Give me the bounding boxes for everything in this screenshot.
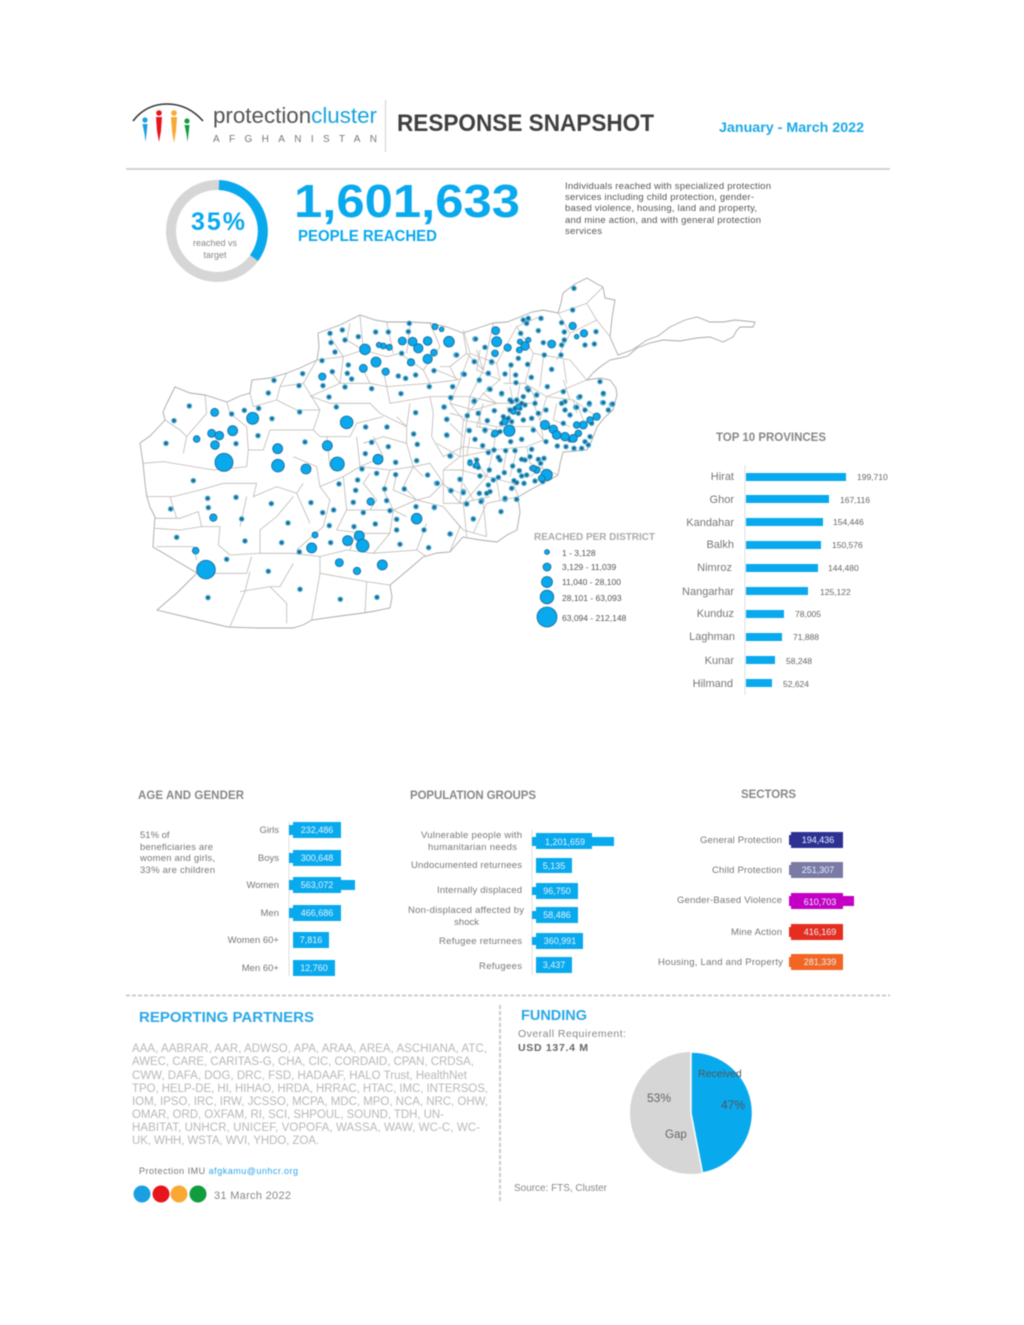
province values: 125,122 [820,587,851,597]
legend ranges: 28,101 - 63,093 [562,593,622,603]
row: internally displaced [437,883,578,899]
logo wordmark: protectioncluster [213,103,377,128]
icon: arc and four figures [133,104,203,143]
panel: population groups [408,790,614,975]
donut: 35% reached vs target: 35% [191,208,245,236]
legend ranges [562,548,627,623]
pie chart: received vs gap: Received [698,1068,742,1080]
row: vulnerable people: 1,201,659 [545,837,585,847]
row: men: 466,686 [301,908,333,918]
panel: reporting partners [132,1009,488,1202]
legend marker sizes [537,550,557,627]
province labels: Kunduz [697,608,734,620]
logo: protection cluster Afghanistan [133,103,377,145]
partners list: CWW, DAFA, DOG, DRC, FSD, HADAAF, HALO Trust, HealthNet [132,1070,468,1082]
description text: services including child protection, gender- [565,192,754,203]
province values: 199,710 [857,472,888,482]
row: girls: 232,486 [301,825,333,835]
row: girls: Girls [259,825,279,836]
row: men 60+ [242,960,335,976]
row: women 60+: Women 60+ [228,935,279,946]
bars [746,473,846,687]
partners list: IOM, IPSO, IRC, IRW, JCSSO, MCPA, MDC, MPO, NCA, NRC, OHW, [132,1096,488,1108]
province values: 71,888 [793,632,819,642]
row: housing, land and property [658,954,843,970]
row: undocumented returnees: Undocumented returnees [411,860,522,871]
province labels: Laghman [689,631,735,643]
pie chart: received vs gap: 47% [721,1098,745,1112]
note on beneficiaries: 33% are children [140,865,215,876]
legend ranges: 3,129 - 11,039 [562,562,616,572]
row: boys: 300,648 [301,853,333,863]
donut: 35% reached vs target: target [203,250,227,260]
heading: REPORTING PARTNERS [139,1009,314,1026]
province labels: Kandahar [686,517,734,529]
row: housing, land and property: 281,339 [804,957,836,967]
row: vulnerable people [421,830,614,853]
province labels: Nangarhar [682,586,734,598]
description text: services [565,226,602,237]
note on beneficiaries: beneficiaries are [140,842,213,853]
row: refugees [479,957,572,973]
row: refugees: Refugees [479,961,522,972]
row: women 60+ [228,932,329,948]
row: boys [258,850,341,866]
province labels: Hirat [711,471,734,483]
contact: Protection IMU afgkamu@unhcr.org [139,1166,298,1176]
chart title: TOP 10 PROVINCES [716,432,826,444]
row: non-displaced affected by shock: 58,486 [543,910,571,920]
panel: sectors [658,789,854,970]
pie chart: received vs gap: Gap [665,1129,687,1141]
description text: and mine action, and with general protection [565,215,761,226]
province labels: Ghor [710,494,734,506]
row: vulnerable people: Vulnerable people with [421,830,522,841]
note on beneficiaries [139,830,215,876]
panel: funding [514,1007,753,1194]
description text: Individuals reached with specialized protection [565,181,771,192]
row: mine action: 416,169 [804,927,836,937]
province labels: Kunar [705,655,734,667]
row: men 60+: 12,760 [300,963,328,973]
map outline [140,278,755,628]
partners list: OMAR, ORD, OXFAM, RI, SCI, SHPOUL, SOUND, TDH, UN- [132,1109,444,1121]
heading: AGE AND GENDER [138,790,245,802]
source note: Source: FTS, Cluster [514,1183,608,1194]
row: general protection [700,832,843,848]
map legend: reached per district [534,532,655,627]
district markers: dense eastern clusters [470,389,613,502]
overall requirement: Overall Requirement: [518,1028,626,1040]
report date: 31 March 2022 [214,1190,291,1202]
legend ranges: 63,094 - 212,148 [562,613,627,623]
amount: USD 137.4 M [518,1042,588,1054]
row: gender-based violence: 610,703 [804,897,836,907]
district markers: large, north-east [468,322,600,482]
pie chart: received vs gap: 53% [647,1091,671,1105]
note on beneficiaries: 51% of [140,830,170,841]
row: internally displaced: 96,750 [543,886,571,896]
row: refugee returnees [439,933,583,949]
row: undocumented returnees [411,858,572,873]
row: refugee returnees: Refugee returnees [439,936,522,947]
heading: SECTORS [741,789,796,801]
row: non-displaced affected by shock: shock [454,917,479,928]
partners list: UK, WHH, WSTA, WVI, YHDO, ZOA. [132,1135,319,1147]
row: child protection: Child Protection [712,865,782,876]
row: women [246,877,355,893]
row: gender-based violence [677,893,854,909]
row: housing, land and property: Housing, Land and Property [658,957,783,968]
legend ranges: 11,040 - 28,100 [562,577,621,587]
row: mine action [731,924,843,940]
row: women: Women [246,880,279,891]
row: child protection [712,862,843,878]
row: men [261,905,341,921]
title: RESPONSE SNAPSHOT [397,110,654,137]
district boundaries west and centre [143,315,497,627]
province labels [682,471,735,690]
province values [783,472,888,689]
province labels: Nimroz [697,562,732,574]
date range: January - March 2022 [719,119,864,135]
row: general protection: General Protection [700,835,782,846]
partners list: AWEC, CARE, CARITAS-G, CHA, CIC, CORDAID, CPAN, CRDSA, [132,1056,474,1068]
province values: 150,576 [832,540,863,550]
row: women: 563,072 [301,880,333,890]
row: boys: Boys [258,853,279,864]
province values: 167,116 [840,495,870,505]
partners list: TPO, HELP-DE, HI, HIHAO, HRDA, HRRAC, HTAC, IMC, INTERSOS, [132,1083,488,1095]
province values: 52,624 [783,679,809,689]
row: women 60+: 7,816 [300,935,322,945]
row: child protection: 251,307 [802,865,834,875]
row: internally displaced: Internally displaced [437,885,522,896]
row: men: Men [261,908,279,919]
province values: 144,480 [828,563,859,573]
icon: four coloured dots [134,1186,206,1202]
district markers: large, west and centre [192,324,454,579]
row: non-displaced affected by shock: Non-displaced affected by [408,905,524,916]
description text: based violence, housing, land and property, [565,203,757,214]
panel: age and gender [138,790,355,976]
province values: 78,005 [795,609,821,619]
partners list: HABITAT, UNHCR, UNICEF, VOPOFA, WASSA, WAW, WC-C, WC- [132,1122,480,1134]
province values: 58,248 [786,656,812,666]
headline number: 1,601,633 [294,175,520,227]
heading: POPULATION GROUPS [410,790,536,802]
district markers: small, west and centre [166,323,492,599]
row: refugee returnees: 360,991 [544,936,576,946]
partners list: AAA, AABRAR, AAR, ADWSO, APA, ARAA, AREA, ASCHIANA, ATC, [132,1043,487,1055]
row: non-displaced affected by shock [408,905,578,928]
bar chart: top 10 provinces [682,432,888,695]
row: refugees: 3,437 [543,960,565,970]
row: gender-based violence: Gender-Based Violence [677,895,782,906]
row: girls [259,822,341,838]
legend ranges: 1 - 3,128 [562,548,596,558]
district boundaries north-east [437,287,610,537]
province values: 154,446 [833,517,864,527]
province labels: Balkh [706,539,734,551]
province labels: Hilmand [693,678,733,690]
row: undocumented returnees: 5,135 [543,861,565,871]
description text [565,181,771,237]
row: men 60+: Men 60+ [242,963,279,974]
partners list [132,1043,488,1147]
people reached label: PEOPLE REACHED [298,228,437,245]
legend title: REACHED PER DISTRICT [534,532,655,543]
logo subtitle: AFGHANISTAN [213,134,377,145]
heading: FUNDING [521,1007,587,1024]
donut: 35% reached vs target: reached vs [193,238,238,248]
donut: 35% reached vs target [171,185,263,277]
map: people reached per district [140,278,755,628]
row: vulnerable people: humanitarian needs [428,842,517,853]
note on beneficiaries: women and girls, [139,853,215,864]
pie chart: received vs gap [630,1052,753,1174]
row: general protection: 194,436 [802,835,834,845]
row: mine action: Mine Action [731,927,782,938]
district markers: small, north-east [434,288,612,534]
